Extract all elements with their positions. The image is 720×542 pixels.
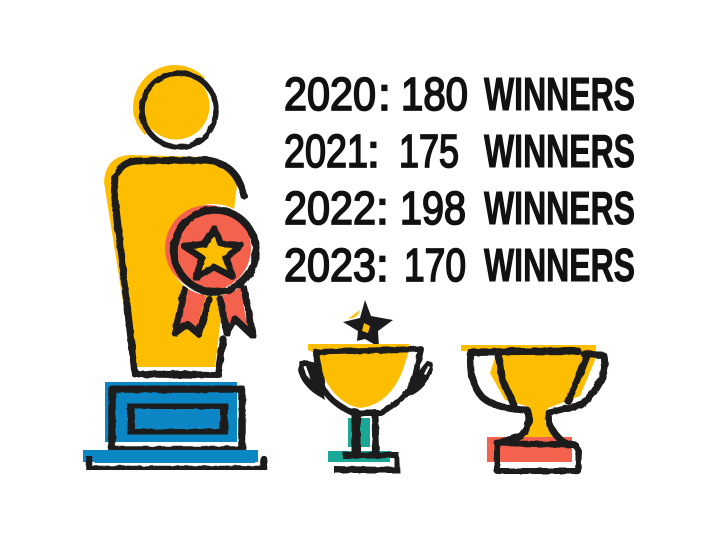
row: 2023: WINNERS bbox=[484, 239, 635, 291]
rosette ribbons bbox=[175, 285, 253, 336]
row: 2021: 175 bbox=[399, 125, 459, 177]
row: 2023: : bbox=[376, 239, 389, 291]
row: 2020: : bbox=[378, 68, 391, 120]
row: 2022: 2022 bbox=[284, 182, 376, 234]
row: 2021: 2021 bbox=[284, 125, 368, 177]
row: 2020 bbox=[284, 68, 635, 120]
row: 2022: : bbox=[376, 182, 389, 234]
row: 2023: 170 bbox=[404, 239, 466, 291]
row: 2022: 198 bbox=[400, 182, 466, 234]
cup outline bbox=[470, 351, 605, 471]
trophy outline bbox=[298, 349, 433, 473]
row: 2023: 2023 bbox=[284, 239, 376, 291]
row: 2021 bbox=[284, 125, 635, 177]
row: 2021: : bbox=[367, 125, 380, 177]
cup fill bbox=[461, 345, 596, 440]
row: 2020: 180 bbox=[401, 68, 468, 120]
row: 2022 bbox=[284, 182, 635, 234]
icon: person award statue bbox=[104, 65, 259, 375]
statue body bbox=[104, 155, 244, 375]
row: 2023 bbox=[284, 239, 635, 291]
row: 2021: WINNERS bbox=[484, 125, 635, 177]
trophy star bbox=[343, 300, 393, 347]
icon: star trophy bbox=[298, 300, 433, 473]
icon: cup trophy with handles bbox=[461, 345, 605, 471]
row: 2020: 2020 bbox=[284, 68, 376, 120]
teal stem and foot bbox=[328, 418, 390, 462]
rosette medal bbox=[165, 204, 259, 296]
red foot bbox=[487, 437, 572, 462]
row: 2022: WINNERS bbox=[484, 182, 635, 234]
winners per year text bbox=[284, 68, 635, 291]
row: 2020: WINNERS bbox=[484, 68, 635, 120]
statue plinth bbox=[83, 382, 264, 469]
statue head bbox=[133, 65, 216, 147]
trophy cup bowl bbox=[308, 344, 409, 408]
rosette star bbox=[184, 228, 241, 278]
